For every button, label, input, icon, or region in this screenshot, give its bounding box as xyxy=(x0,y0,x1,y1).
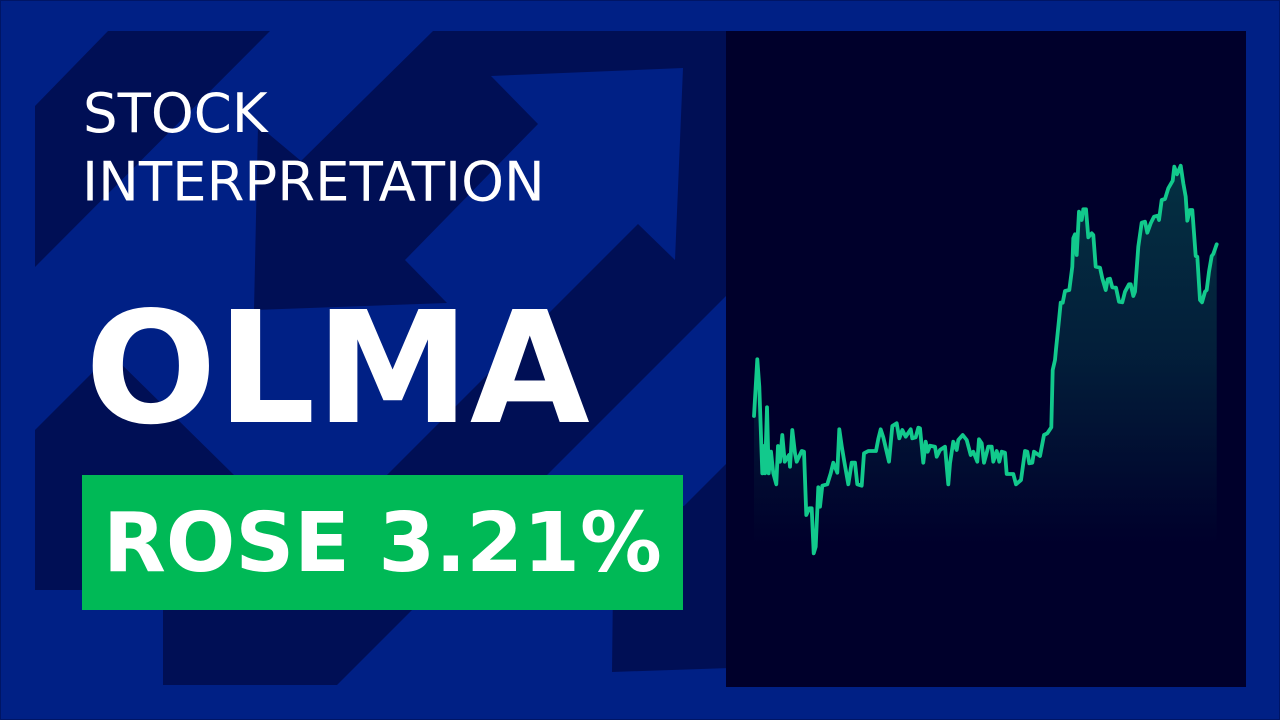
area chart xyxy=(754,166,1217,560)
heading: stock interpretation: INTERPRETATION xyxy=(82,150,545,214)
price line xyxy=(754,166,1217,553)
badge: rose 3.21%: ROSE 3.21% xyxy=(103,496,662,591)
background arrows xyxy=(35,31,730,685)
ticker: OLMA: OLMA xyxy=(85,278,590,459)
badge: rose 3.21% xyxy=(82,475,683,610)
heading: stock interpretation: STOCK xyxy=(83,81,269,145)
heading: stock interpretation xyxy=(82,81,545,214)
chart panel xyxy=(726,31,1246,687)
price area fill xyxy=(754,166,1217,560)
